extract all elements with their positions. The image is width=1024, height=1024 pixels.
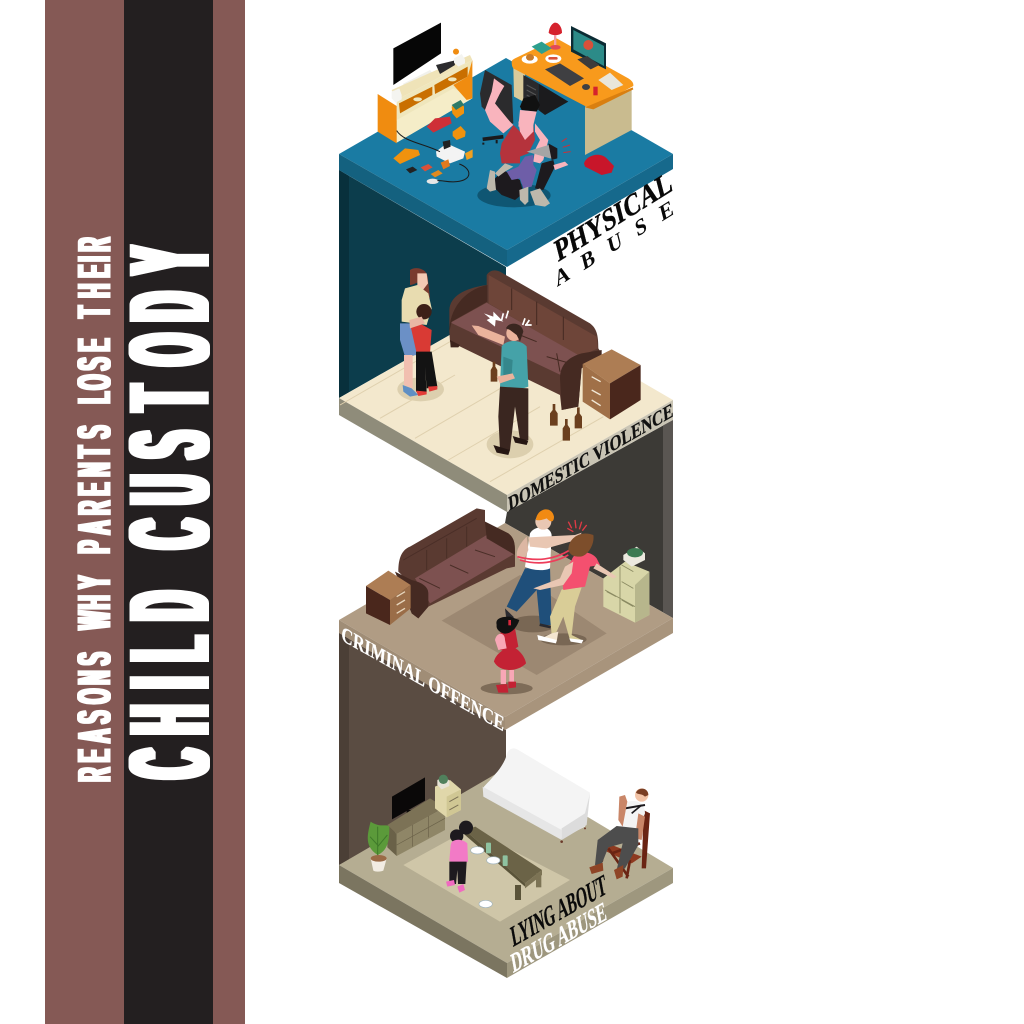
panel: lying about drug abuse [339, 633, 673, 979]
icon: parent hitting child [485, 78, 571, 207]
icon: crying girl [494, 617, 526, 693]
label: domestic violence: DOMESTIC VIOLENCE [507, 399, 674, 516]
label: lying about: LYING ABOUT [509, 869, 609, 954]
icon: wooden side table [583, 349, 641, 419]
icon: gaming chair [480, 70, 513, 145]
icon: shadow [477, 183, 551, 207]
heading: reasons why parents lose their: REASONS WHY PARENTS LOSE THEIR [68, 237, 121, 782]
room illustration: shouting father [340, 268, 641, 482]
icon: toy cars and game consoles [393, 100, 473, 184]
icon: potted plant [368, 822, 389, 872]
icon: floor shadows [397, 377, 533, 458]
panel: domestic violence [339, 170, 674, 516]
icon: toy car red [584, 155, 614, 175]
icon: floorboards [340, 342, 603, 482]
icon: orange tv cabinet [378, 49, 472, 143]
icon: filing cabinet with plant [603, 547, 649, 623]
label: abuse: A B U S E [552, 194, 676, 292]
icon: man on wooden chair [589, 788, 650, 879]
panel: physical abuse [339, 23, 676, 292]
label: physical: PHYSICAL [551, 164, 675, 269]
label: criminal offence: CRIMINAL OFFENCE [341, 621, 505, 737]
panel: criminal offence [339, 420, 673, 737]
icon: lamp and monitor [549, 23, 606, 69]
icon: shadows [481, 616, 587, 694]
label: drug abuse: DRUG ABUSE [509, 896, 609, 979]
icon: white sofa [483, 748, 590, 843]
icon: shouting father [472, 311, 532, 455]
icon: man grabbing woman's hair [505, 509, 587, 628]
icon: beer bottles [491, 362, 582, 441]
icon: rug [403, 828, 570, 922]
icon: brown sofa [395, 508, 515, 618]
icon: rug [442, 575, 607, 675]
icon: computer desk [512, 23, 633, 155]
room illustration: living room [368, 748, 650, 922]
heading: child custody: CHILD CUSTODY [107, 247, 232, 778]
icon: coffee table [465, 827, 542, 908]
icon: wooden side table [366, 571, 411, 625]
room illustration: game room [378, 23, 633, 207]
icon: brown sofa [449, 270, 602, 410]
icon: girl in pink [446, 821, 473, 893]
icon: side cabinet with plant [435, 775, 461, 817]
icon: television [393, 23, 441, 88]
panel: title sidebar [45, 0, 245, 1024]
icon: woman in pink shirt [533, 534, 617, 643]
room illustration: altercation [366, 508, 649, 694]
icon: television and cabinet [387, 777, 445, 856]
icon: mother hugging son [400, 268, 437, 397]
